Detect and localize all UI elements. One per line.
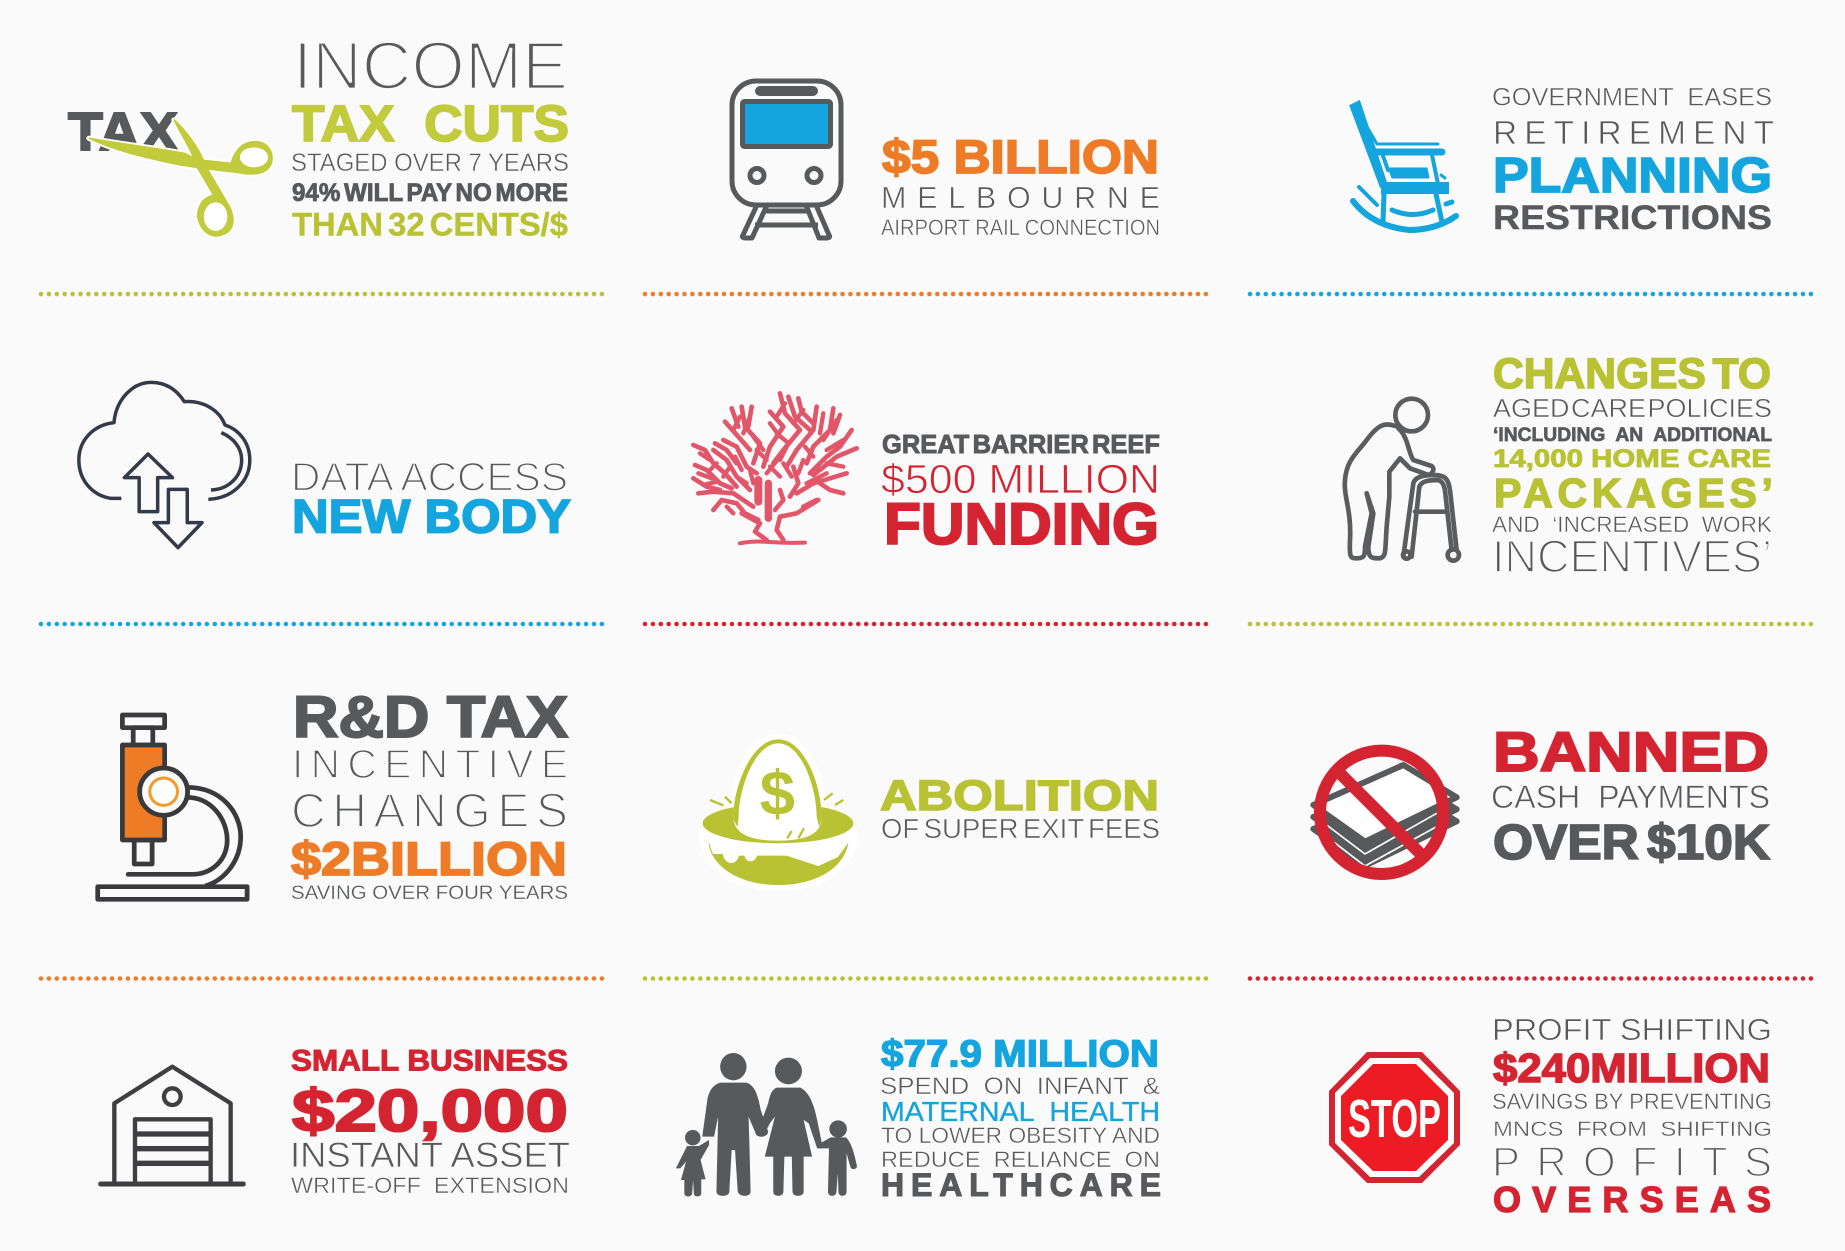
text: savings by preventing: SAVINGS BY PREVENTING — [1492, 1089, 1772, 1114]
text: retirement: RETIREMENT — [1493, 115, 1774, 152]
heading: 240 million: $240MILLION — [1493, 1045, 1770, 1091]
text: melbourne: MELBOURNE — [881, 181, 1160, 215]
text: 500 million: $500 MILLION — [881, 456, 1160, 502]
panel: super exit fees — [698, 734, 1160, 891]
panel: great barrier reef — [693, 393, 1160, 557]
icon: garage — [101, 1067, 243, 1184]
icon: train — [732, 81, 841, 238]
text: restrictions: RESTRICTIONS — [1493, 199, 1772, 237]
text: 94 percent: 94% WILL PAY NO MORE — [292, 180, 568, 207]
text: reduce reliance: REDUCE RELIANCE ON — [881, 1147, 1160, 1172]
panel: data access — [79, 382, 571, 548]
icon: scissors cutting tax — [68, 102, 272, 236]
text: aged care policies: AGED CARE POLICIES — [1493, 393, 1772, 423]
panel: retirement planning — [1351, 84, 1774, 237]
icon text: stop: STOP — [1348, 1089, 1441, 1149]
text: airport rail connection: AIRPORT RAIL CONNECTION — [881, 215, 1160, 240]
text: write off extension: WRITE-OFF EXTENSION — [291, 1173, 569, 1198]
icon: elderly person with walker — [1345, 399, 1459, 561]
text: great barrier reef: GREAT BARRIER REEF — [882, 429, 1160, 459]
panel: airport rail — [732, 81, 1160, 240]
heading: changes to: CHANGES TO — [1493, 350, 1771, 398]
heading: healthcare: HEALTHCARE — [881, 1167, 1161, 1203]
text: including an additional: ‘INCLUDING AN ADDITIONAL — [1493, 424, 1772, 446]
text: than 32 cents: THAN 32 CENTS/$ — [292, 206, 568, 242]
text: incentives: INCENTIVES’ — [1492, 531, 1772, 582]
icon text: dollar sign: $ — [760, 759, 795, 829]
text: profits: PROFITS — [1492, 1138, 1772, 1185]
icon: microscope — [98, 715, 247, 899]
panel: R and D tax — [98, 685, 568, 904]
heading: abolition: ABOLITION — [880, 772, 1159, 820]
panel: profit shifting — [1329, 1013, 1772, 1220]
icon: coral — [693, 393, 857, 543]
text: maternal health: MATERNAL HEALTH — [881, 1096, 1160, 1127]
text: profit shifting: PROFIT SHIFTING — [1492, 1013, 1772, 1047]
icon: banned cash stack — [1313, 751, 1457, 874]
heading: 20000: $20,000 — [292, 1078, 568, 1144]
heading: planning: PLANNING — [1493, 149, 1772, 203]
panel: infant and maternal health — [676, 1034, 1161, 1203]
heading: new body: NEW BODY — [292, 490, 571, 544]
heading: banned: BANNED — [1493, 720, 1769, 783]
text: changes: CHANGES — [291, 785, 568, 838]
heading: r and d tax: R&D TAX — [293, 685, 568, 750]
text: data access: DATA ACCESS — [291, 456, 568, 500]
text: 14000 home care: 14,000 HOME CARE — [1493, 446, 1771, 473]
heading: 2 billion: $2BILLION — [291, 832, 567, 885]
icon: cloud with arrows — [79, 382, 250, 548]
heading: funding: FUNDING — [884, 492, 1159, 557]
text: incentive: INCENTIVE — [292, 741, 568, 787]
panel: aged care — [1345, 350, 1773, 582]
icon: nest egg — [698, 734, 858, 891]
icon: stop sign — [1329, 1052, 1460, 1183]
text: mncs from shifting: MNCS FROM SHIFTING — [1493, 1118, 1772, 1141]
text: instant asset: INSTANT ASSET — [290, 1136, 570, 1175]
heading: 5 billion: $5 BILLION — [882, 130, 1159, 183]
heading: tax cuts: TAX CUTS — [292, 95, 569, 152]
panel: banned cash payments — [1313, 720, 1770, 874]
text: to lower obesity: TO LOWER OBESITY AND — [881, 1123, 1160, 1148]
icon: scissors cutting tax: TAX — [68, 102, 178, 162]
heading: 77.9 million: $77.9 MILLION — [881, 1034, 1159, 1076]
icon: rocking chair — [1351, 102, 1456, 230]
text: and increased work: AND ‘INCREASED WORK — [1492, 512, 1772, 537]
heading: over 10k: OVER $10K — [1493, 815, 1770, 870]
text: small business: SMALL BUSINESS — [291, 1044, 568, 1078]
heading: overseas: OVERSEAS — [1493, 1179, 1771, 1220]
text: government eases: GOVERNMENT EASES — [1492, 84, 1772, 112]
heading: packages: PACKAGES’ — [1494, 470, 1773, 516]
text: of super exit fees: OF SUPER EXIT FEES — [881, 813, 1160, 844]
panel: small business — [101, 1044, 570, 1198]
text: cash payments: CASH PAYMENTS — [1491, 779, 1770, 815]
text: spend on infant: SPEND ON INFANT & — [880, 1073, 1160, 1100]
heading: income: INCOME — [293, 28, 568, 104]
panel: income tax cuts — [68, 28, 569, 242]
text: saving over four years: SAVING OVER FOUR YEARS — [291, 882, 568, 904]
icon: family — [676, 1053, 857, 1196]
text: staged: STAGED OVER 7 YEARS — [291, 150, 569, 177]
